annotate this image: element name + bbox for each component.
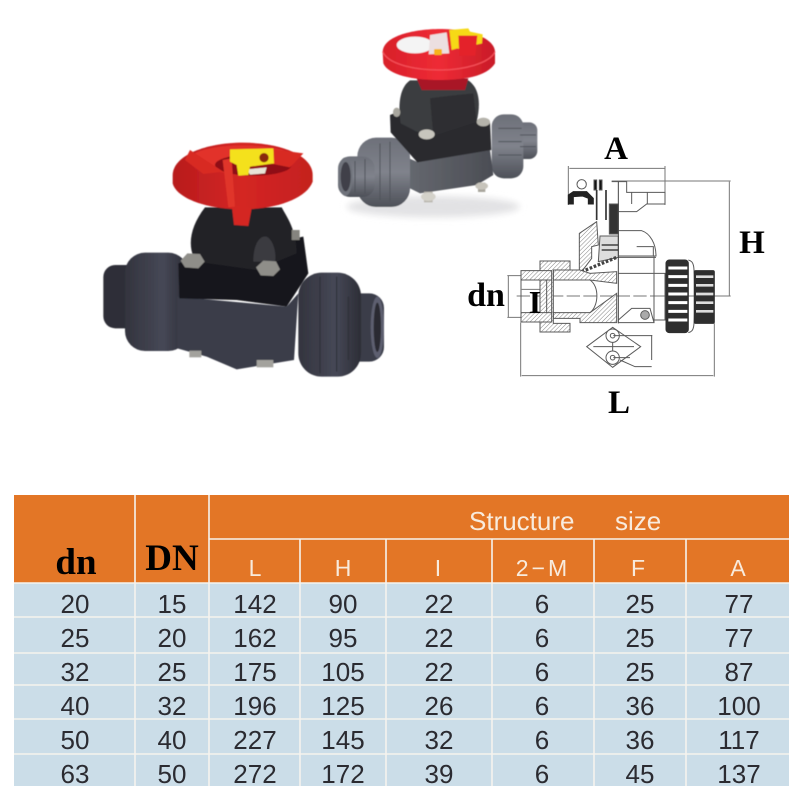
header Structure size: Structure — [469, 506, 574, 536]
row dn 25: 20 — [158, 623, 186, 653]
row dn 32 — [61, 657, 753, 687]
red stem — [417, 78, 468, 90]
bolts — [181, 230, 300, 367]
shadow under small valve — [347, 196, 520, 217]
row dn 40: 100 — [717, 691, 761, 721]
row dn 25: 6 — [535, 623, 549, 653]
row dn 50: 145 — [321, 725, 365, 755]
row dn 50: 40 — [158, 725, 186, 755]
cross-section dimension drawing — [467, 131, 765, 421]
union left nut — [540, 261, 570, 332]
row dn 20 — [61, 589, 753, 619]
row dn 32: 25 — [626, 657, 654, 687]
row dn 40: 6 — [535, 691, 549, 721]
left union — [103, 253, 188, 351]
header Structure size: size — [615, 506, 661, 536]
row dn 25: 25 — [626, 623, 654, 653]
row dn 50: 227 — [233, 725, 277, 755]
yellow indicator — [230, 148, 274, 176]
row dn 32: 105 — [321, 657, 365, 687]
label dn: dn — [467, 277, 505, 314]
row dn 20: 142 — [233, 589, 277, 619]
label I: I — [529, 284, 541, 320]
column headings: L — [249, 555, 262, 581]
table body band — [14, 583, 789, 786]
row dn 40 — [61, 691, 761, 721]
row dn 20: 15 — [158, 589, 186, 619]
row dn 25: 22 — [425, 623, 453, 653]
row dn 63 — [61, 759, 761, 789]
row dn 63: 63 — [61, 759, 89, 789]
row dn 32: 32 — [61, 657, 89, 687]
label L: L — [608, 385, 630, 421]
header DN: DN — [145, 538, 199, 579]
black flange — [178, 237, 308, 307]
right union nut — [666, 260, 714, 333]
stem and bonnet hatching — [579, 222, 598, 272]
valve body section — [553, 270, 617, 283]
table header band — [14, 495, 789, 583]
header dn: dn — [55, 542, 97, 583]
photo: large diaphragm valve with red handwheel — [103, 143, 384, 377]
row dn 32: 25 — [158, 657, 186, 687]
row dn 50: 32 — [425, 725, 453, 755]
row dn 50: 50 — [61, 725, 89, 755]
bonnet dome — [191, 207, 297, 270]
row dn 25: 95 — [329, 623, 357, 653]
row dn 32: 22 — [425, 657, 453, 687]
photo: small diaphragm valve with grey union ends — [338, 28, 537, 217]
row dn 25: 162 — [233, 623, 277, 653]
lower body — [405, 150, 493, 193]
row dn 63: 172 — [321, 759, 365, 789]
right union — [492, 114, 537, 178]
row dn 63: 6 — [535, 759, 549, 789]
row dn 32: 6 — [535, 657, 549, 687]
bolts bottom — [421, 182, 488, 202]
column headings: H — [335, 555, 351, 581]
right union — [298, 273, 384, 377]
dimension lines — [507, 166, 731, 377]
spring stack — [609, 204, 618, 234]
column headings: F — [631, 555, 645, 581]
row dn 40: 125 — [321, 691, 365, 721]
bonnet right side — [618, 231, 656, 257]
row dn 63: 39 — [425, 759, 453, 789]
row dn 63: 137 — [717, 759, 761, 789]
red handwheel — [173, 143, 313, 226]
column headings: A — [730, 555, 746, 581]
diaphragm beads — [582, 257, 617, 272]
row dn 20: 25 — [626, 589, 654, 619]
column headings: 2−M — [516, 555, 570, 581]
row dn 20: 6 — [535, 589, 549, 619]
row dn 40: 40 — [61, 691, 89, 721]
bolts top — [393, 108, 490, 139]
row dn 25 — [61, 623, 753, 653]
red handwheel — [383, 29, 495, 80]
yellow indicator — [449, 28, 483, 52]
black flange — [390, 112, 491, 162]
row dn 20: 90 — [329, 589, 357, 619]
row dn 25: 25 — [61, 623, 89, 653]
handwheel section — [568, 180, 665, 220]
compressor — [598, 236, 618, 262]
dimension table — [14, 495, 789, 789]
row dn 40: 196 — [233, 691, 277, 721]
row dn 50: 36 — [626, 725, 654, 755]
body right half — [618, 257, 665, 323]
lower body — [177, 293, 298, 369]
row dn 40: 26 — [425, 691, 453, 721]
row dn 40: 36 — [626, 691, 654, 721]
row dn 20: 22 — [425, 589, 453, 619]
column headings — [249, 555, 746, 581]
row dn 50: 6 — [535, 725, 549, 755]
row dn 63: 45 — [626, 759, 654, 789]
row dn 40: 32 — [158, 691, 186, 721]
row dn 50: 117 — [718, 725, 760, 755]
label H: H — [739, 225, 765, 261]
row dn 32: 87 — [725, 657, 753, 687]
row dn 63: 50 — [158, 759, 186, 789]
row dn 20: 20 — [61, 589, 89, 619]
bonnet dome — [399, 80, 479, 136]
label A: A — [604, 131, 628, 167]
row dn 63: 272 — [233, 759, 277, 789]
left union — [338, 138, 410, 207]
row dn 32: 175 — [233, 657, 277, 687]
centre axis — [617, 182, 620, 323]
row dn 25: 77 — [725, 623, 753, 653]
row dn 50 — [61, 725, 760, 755]
row dn 20: 77 — [725, 589, 753, 619]
column headings: I — [435, 555, 441, 581]
mounting base — [587, 327, 652, 367]
